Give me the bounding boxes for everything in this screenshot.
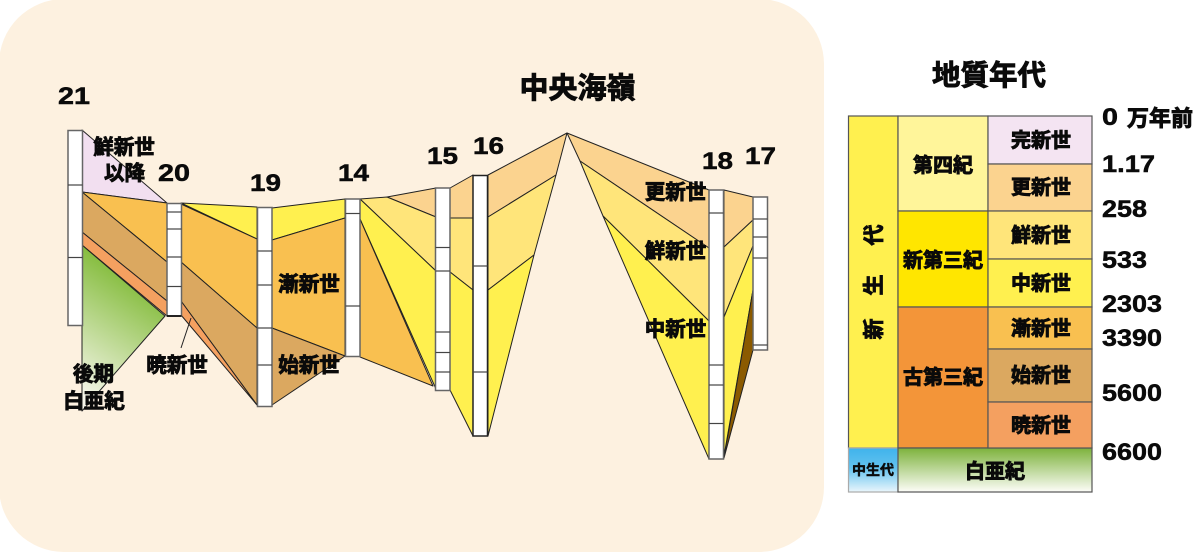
period: Paleogene [898, 307, 988, 448]
age scale in units of 10,000 years ago: 2303 [1102, 291, 1162, 318]
age scale in units of 10,000 years ago [1102, 104, 1193, 466]
core numbers: 16 [473, 133, 504, 160]
layers: core 14 to core 15 [360, 188, 436, 389]
epoch labels on section: 後期 [73, 363, 114, 386]
chart: sediment layers between cores [82, 130, 753, 459]
age scale in units of 10,000 years ago: 1.17 [1102, 151, 1155, 178]
period: Quaternary: 第四紀 [913, 154, 973, 177]
epoch: Holocene: 完新世 [1011, 129, 1071, 152]
period: Cretaceous: 白亜紀 [965, 460, 1025, 483]
age scale in units of 10,000 years ago: 万年前 [1127, 106, 1193, 131]
core numbers: 14 [338, 160, 369, 187]
era: Cenozoic [848, 116, 898, 448]
period: Neogene: 新第三紀 [903, 249, 983, 272]
core column 15 [436, 188, 450, 390]
epoch: Pleistocene [988, 164, 1092, 211]
epoch: Eocene [988, 349, 1092, 402]
table: geologic time scale [848, 116, 1092, 492]
layers: ridge crest to core 18 [567, 133, 709, 459]
epoch labels on section: 始新世 [278, 354, 340, 377]
age scale in units of 10,000 years ago: 6600 [1102, 439, 1162, 466]
epoch labels on section: 暁新世 [146, 354, 208, 377]
period: Paleogene: 古第三紀 [903, 366, 983, 389]
epoch labels on section: 漸新世 [278, 273, 340, 296]
layers: core 20 to core 19 [181, 203, 257, 405]
core numbers: 15 [427, 143, 458, 170]
leader line: Paleocene label [181, 318, 191, 348]
epoch: Miocene: 中新世 [1011, 272, 1071, 295]
layers: core 18 to core 17 [724, 190, 753, 458]
era: Cenozoic: 生 [863, 274, 886, 296]
epoch labels on section: 鮮新世 [93, 136, 155, 159]
core column 18 [709, 190, 724, 459]
layers: core 15 to core 16 [450, 175, 473, 436]
heading: geologic time: 地質年代 [932, 60, 1046, 92]
core numbers [58, 83, 776, 197]
age scale in units of 10,000 years ago: 3390 [1102, 325, 1162, 352]
epoch: Oligocene [988, 307, 1092, 349]
epoch: Holocene [988, 116, 1092, 164]
core numbers: 20 [158, 160, 190, 187]
core numbers: 21 [58, 83, 90, 110]
core numbers: 17 [745, 143, 776, 170]
core column 19 [258, 208, 272, 406]
epoch: Eocene: 始新世 [1011, 364, 1071, 387]
title: mid-ocean ridge: 中央海嶺 [519, 72, 636, 105]
epoch: Pleistocene: 更新世 [1011, 176, 1071, 199]
core column 16 [473, 176, 488, 436]
epoch: Pliocene [988, 211, 1092, 259]
core column 17 [753, 197, 768, 350]
layers: core 16 to ridge crest [488, 133, 567, 436]
epoch labels on section: 以降 [104, 162, 145, 185]
core column 21 [68, 130, 82, 326]
epoch: Oligocene: 漸新世 [1011, 317, 1071, 340]
epoch labels on section: 更新世 [645, 181, 706, 204]
era: Mesozoic: 中生代 [852, 462, 894, 478]
layers: core 19 to core 14 [272, 199, 345, 405]
layers: core 21 to core 20 [82, 130, 167, 411]
core numbers: 18 [702, 148, 733, 175]
era: Cenozoic: 代 [863, 224, 886, 246]
core column 20 [167, 204, 182, 316]
core column 14 [346, 199, 360, 356]
era: Cenozoic: 新 [863, 318, 886, 340]
epoch: Miocene [988, 259, 1092, 307]
era: Mesozoic [848, 448, 898, 492]
epoch labels on section: 鮮新世 [645, 240, 706, 263]
epoch labels on section [63, 136, 706, 413]
epoch: Paleocene [988, 402, 1092, 448]
age scale in units of 10,000 years ago: 0 [1102, 104, 1118, 131]
age scale in units of 10,000 years ago: 258 [1102, 196, 1147, 223]
epoch labels on section: 中新世 [645, 318, 706, 341]
epoch labels on section: 白亜紀 [63, 390, 125, 413]
epoch: Pliocene: 鮮新世 [1011, 224, 1071, 247]
panel: mid-ocean ridge cross-section background [0, 0, 824, 552]
core numbers: 19 [250, 170, 281, 197]
age scale in units of 10,000 years ago: 533 [1102, 247, 1147, 274]
period: Neogene [898, 211, 988, 307]
epoch: Paleocene: 暁新世 [1011, 414, 1071, 437]
period: Quaternary [898, 116, 988, 211]
age scale in units of 10,000 years ago: 5600 [1102, 380, 1162, 407]
period: Cretaceous [898, 448, 1092, 492]
